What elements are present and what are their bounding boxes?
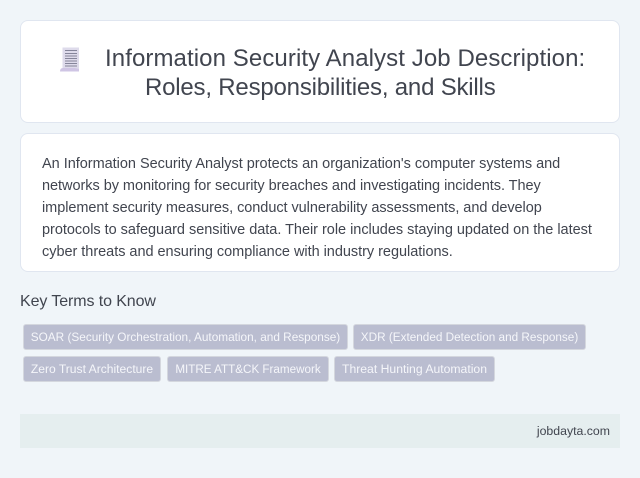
text block: description: implement security measures, conduct vulnerability assessments, and develop bbox=[42, 200, 542, 216]
heading: title line 2: Roles, Responsibilities, and Skills bbox=[145, 74, 496, 101]
tag: Threat Hunting bbox=[334, 356, 495, 382]
tag: XDR bbox=[353, 324, 586, 350]
text block: description: protocols to safeguard sensitive data. Their role includes staying updated on the latest bbox=[42, 222, 592, 238]
heading: title line 1: Information Security Analyst Job Description: bbox=[105, 45, 585, 72]
text block: description bbox=[42, 156, 592, 260]
tag: Threat Hunting: Threat Hunting Automation bbox=[342, 362, 487, 376]
panel: title card bbox=[20, 20, 620, 123]
tag: MITRE: MITRE ATT&CK Framework bbox=[175, 363, 321, 376]
tag: MITRE bbox=[167, 356, 329, 382]
icon: document receipt bbox=[60, 48, 79, 72]
tag: SOAR bbox=[23, 324, 348, 350]
footer text: source: jobdayta.com bbox=[537, 424, 610, 438]
tag: XDR: XDR (Extended Detection and Response) bbox=[361, 331, 578, 344]
text block: description: networks by monitoring for security breaches and investigating incidents. They bbox=[42, 178, 541, 194]
heading: key terms: Key Terms to Know bbox=[20, 293, 156, 310]
tag: Zero Trust bbox=[23, 356, 161, 382]
text block: description: cyber threats and ensuring compliance with industry regulations. bbox=[42, 244, 453, 260]
text block: description: An Information Security Analyst protects an organization's computer systems and bbox=[42, 156, 560, 172]
footer bar bbox=[20, 414, 620, 448]
tag: SOAR: SOAR (Security Orchestration, Automation, and Response) bbox=[31, 330, 340, 344]
tag: Zero Trust: Zero Trust Architecture bbox=[31, 362, 153, 376]
panel: description card bbox=[20, 133, 620, 272]
